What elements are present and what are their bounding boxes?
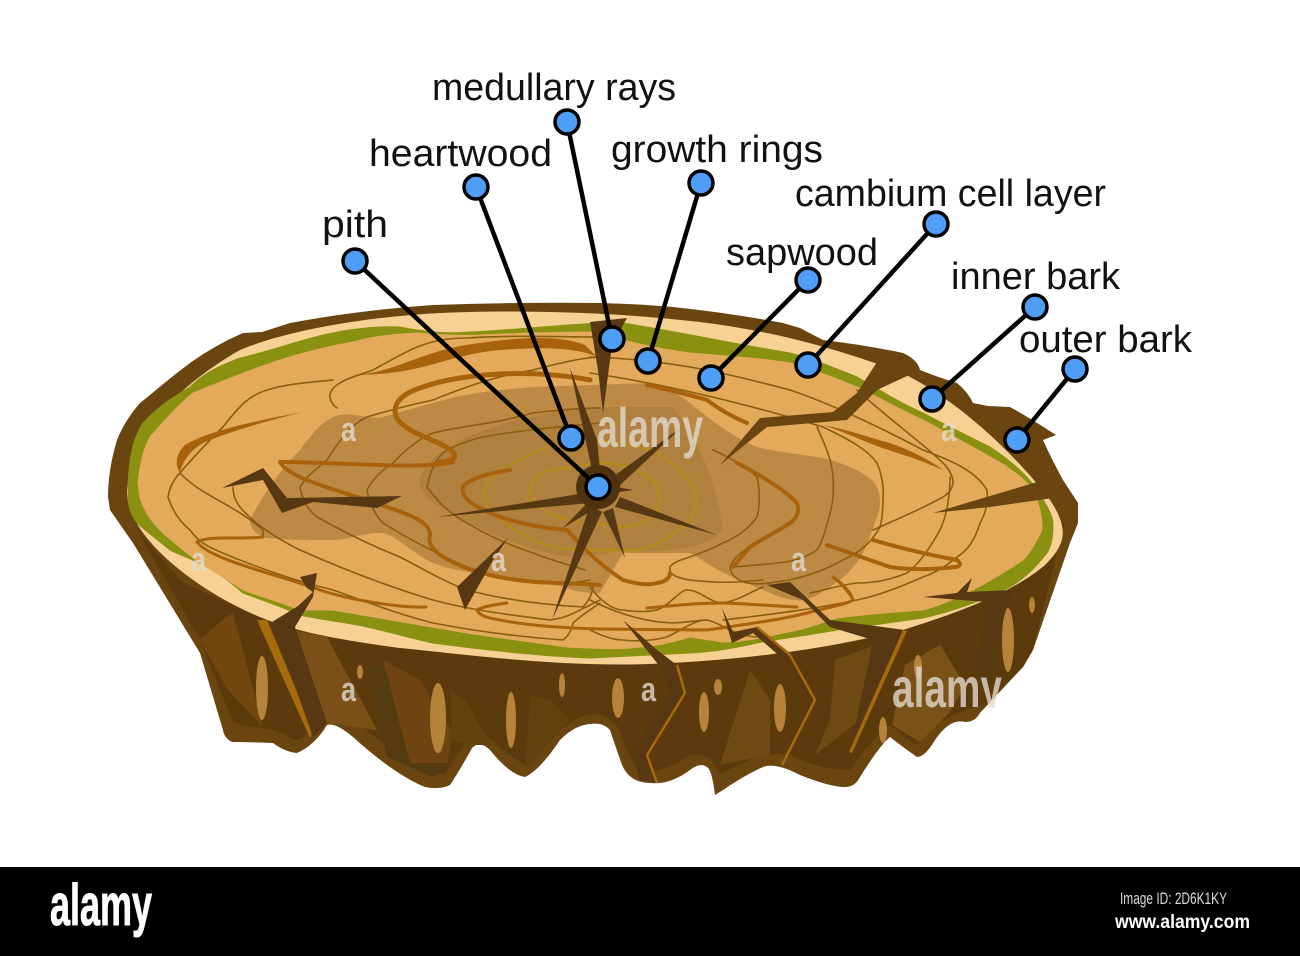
watermark: small a marks: a	[191, 541, 207, 579]
side facet right light 2	[815, 645, 875, 755]
label: inner bark: inner bark	[951, 256, 1121, 298]
side facet mid 2	[525, 695, 570, 770]
website: www.alamy.com	[1114, 912, 1250, 933]
side facet far right	[892, 645, 965, 742]
resin seeds on bark	[256, 597, 1035, 753]
label: sapwood: sapwood	[726, 232, 878, 274]
side facet far right 2	[975, 605, 1008, 690]
watermark: small a marks	[191, 411, 957, 709]
side facet light panel	[293, 630, 377, 730]
outer bark silhouette	[108, 303, 1078, 795]
watermark: small a marks: a	[491, 541, 507, 579]
tree trunk slice illustration	[108, 303, 1078, 795]
inner bark cream ring	[127, 312, 1063, 664]
star cracks from pith	[437, 318, 717, 620]
leader: medullary rays	[555, 110, 624, 351]
central darker heartwood	[420, 407, 723, 557]
leader: cambium cell layer	[796, 212, 948, 377]
leader: pith	[343, 249, 610, 499]
label: pith: pith	[322, 204, 388, 246]
leader: heartwood	[464, 175, 583, 450]
image id: Image ID: 2D6K1KY	[1120, 889, 1227, 908]
footer logo: alamy	[50, 873, 152, 938]
label: heartwood: heartwood	[369, 133, 552, 175]
watermark: small a marks: a	[791, 541, 807, 579]
surface cracks	[222, 362, 1063, 783]
watermark: small a marks: a	[941, 411, 957, 449]
growth rings	[168, 336, 987, 641]
watermark: small a marks: a	[341, 411, 357, 449]
watermark: small a marks: a	[341, 671, 357, 709]
label: outer bark: outer bark	[1019, 319, 1193, 361]
watermark: small a marks: a	[641, 671, 657, 709]
label: cambium cell layer: cambium cell layer	[795, 173, 1106, 215]
watermark: alamy centre: alamy	[597, 396, 703, 459]
side facet right light	[720, 670, 770, 765]
side facet dark	[367, 663, 453, 777]
leader: sapwood	[699, 268, 820, 390]
leader: growth rings	[636, 171, 713, 373]
cambium green ring	[128, 323, 1053, 658]
footer bar	[0, 867, 1300, 956]
side facet brown	[383, 660, 453, 763]
label: medullary rays: medullary rays	[432, 67, 676, 109]
heartwood shade	[250, 383, 880, 600]
leader: inner bark	[920, 295, 1047, 411]
side facet mid	[450, 690, 492, 745]
sapwood surface	[138, 332, 1042, 649]
trunk side shading	[137, 520, 1065, 775]
label: growth rings: growth rings	[611, 129, 823, 171]
watermark: alamy lower right: alamy	[892, 656, 1002, 719]
thick growth streaks	[177, 338, 960, 630]
side facet lighter left	[200, 613, 263, 727]
leader: outer bark	[1005, 357, 1087, 452]
